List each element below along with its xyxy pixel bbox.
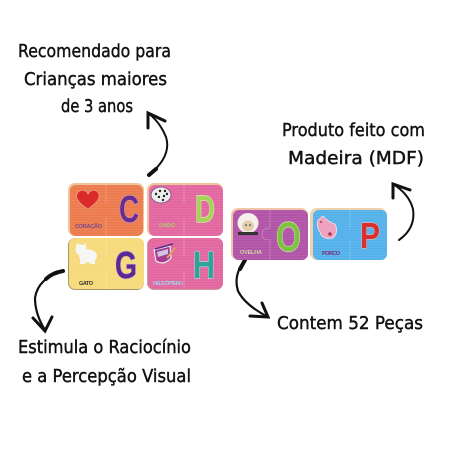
icon: dice [151, 187, 171, 203]
heading: recommended age: Crianças maiores [24, 69, 167, 90]
arrow: to material text [393, 184, 413, 240]
arrow: to piece count [237, 260, 268, 317]
puzzle piece: G: GATO [79, 281, 94, 287]
puzzle piece: C: CORAÇÃO [75, 223, 103, 230]
puzzle piece: H: H [193, 245, 215, 287]
puzzle piece: P: P [360, 215, 380, 256]
heading: material [282, 120, 425, 169]
heading: piece count: Contem 52 Peças [277, 313, 423, 334]
heading: stimulates reasoning: e a Percepção Visual [22, 366, 191, 387]
puzzle piece: C [68, 183, 144, 236]
icon: helicopter [154, 244, 175, 263]
icon: pig [317, 216, 337, 238]
puzzle piece: O [231, 208, 308, 260]
puzzle piece: P: PORCO [322, 251, 341, 257]
icon: sheep [238, 213, 258, 235]
icon: heart [76, 190, 99, 209]
puzzle piece: G: G [115, 245, 137, 287]
heading: material: Madeira (MDF) [288, 148, 424, 169]
puzzle piece: P [310, 208, 387, 260]
puzzle piece: G [68, 238, 144, 290]
heading: recommended age: Recomendado para [18, 41, 171, 62]
heading: stimulates reasoning [18, 337, 191, 387]
arrow: to reasoning text [33, 271, 63, 331]
heading: recommended age [18, 41, 171, 117]
puzzle piece: D [147, 183, 223, 236]
heading: material: Produto feito com [282, 120, 425, 141]
arrow: to age text [148, 113, 167, 175]
puzzle piece: C: C [119, 189, 139, 231]
puzzle piece: O: O [276, 213, 301, 260]
puzzle piece: D: DADO [159, 223, 176, 229]
puzzle piece: H [147, 238, 223, 290]
heading: stimulates reasoning: Estimula o Raciocínio [18, 337, 191, 358]
icon: cat [76, 243, 97, 264]
puzzle piece: O: OVELHA [240, 250, 262, 256]
heading: recommended age: de 3 anos [61, 96, 133, 117]
puzzle piece: H: HELICÓPTERO [153, 279, 184, 287]
puzzle piece: D: D [195, 189, 215, 231]
